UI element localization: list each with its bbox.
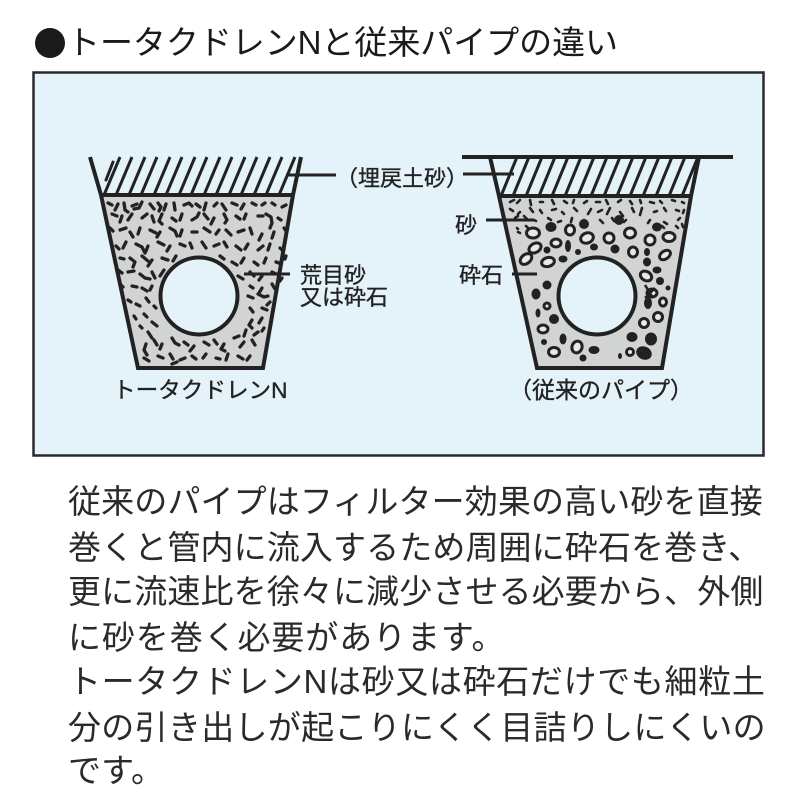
- label: coarse sand or crushed stone: 又は砕石: [300, 285, 388, 310]
- diagram: conventional pipe trench: [462, 157, 733, 368]
- leader: backfill right: [463, 172, 514, 176]
- fine sand layer: [510, 200, 684, 233]
- trench outline: [462, 157, 733, 368]
- label: backfill soil: （埋戻土砂）: [336, 166, 468, 191]
- sand texture: coarse sand or crushed stone: [108, 202, 286, 364]
- body text: 巻くと管内に流入するため周囲に砕石を巻き、: [68, 529, 761, 566]
- body text: に砂を巻く必要があります。: [68, 619, 505, 656]
- pipe: [160, 258, 238, 334]
- title: [35, 24, 618, 61]
- body text: 分の引き出しが起こりにくく目詰りしにくいの: [68, 709, 766, 746]
- gravel: solid stones: [532, 215, 670, 362]
- title text: トータクドレンNと従来パイプの違い: [67, 24, 618, 61]
- body text: 更に流速比を徐々に減少させる必要から、外側: [68, 573, 764, 610]
- body text: です。: [68, 752, 164, 789]
- diagram: Total Drain N trench: [90, 157, 301, 368]
- body text: トータクドレンNは砂又は砕石だけでも細粒土: [68, 663, 765, 700]
- leader: backfill left: [286, 174, 336, 176]
- trench outline: [90, 157, 301, 368]
- icon: title bullet: [35, 28, 65, 58]
- leader: sand: [486, 218, 534, 222]
- label: coarse sand or crushed stone: [300, 263, 388, 310]
- label: sand: 砂: [455, 213, 477, 238]
- label: coarse sand or crushed stone: 荒目砂: [300, 263, 366, 288]
- body text: 従来のパイプはフィルター効果の高い砂を直接: [68, 483, 763, 520]
- leader: coarse sand: [244, 272, 290, 276]
- gravel: hollow stones: [518, 225, 675, 356]
- label: Total Drain N: トータクドレンN: [113, 378, 287, 403]
- body text: [68, 483, 766, 789]
- leader: crushed stone: [512, 272, 537, 276]
- label: conventional pipe: （従来のパイプ）: [509, 377, 693, 403]
- label: crushed stone: 砕石: [459, 263, 503, 288]
- pipe: [558, 258, 636, 334]
